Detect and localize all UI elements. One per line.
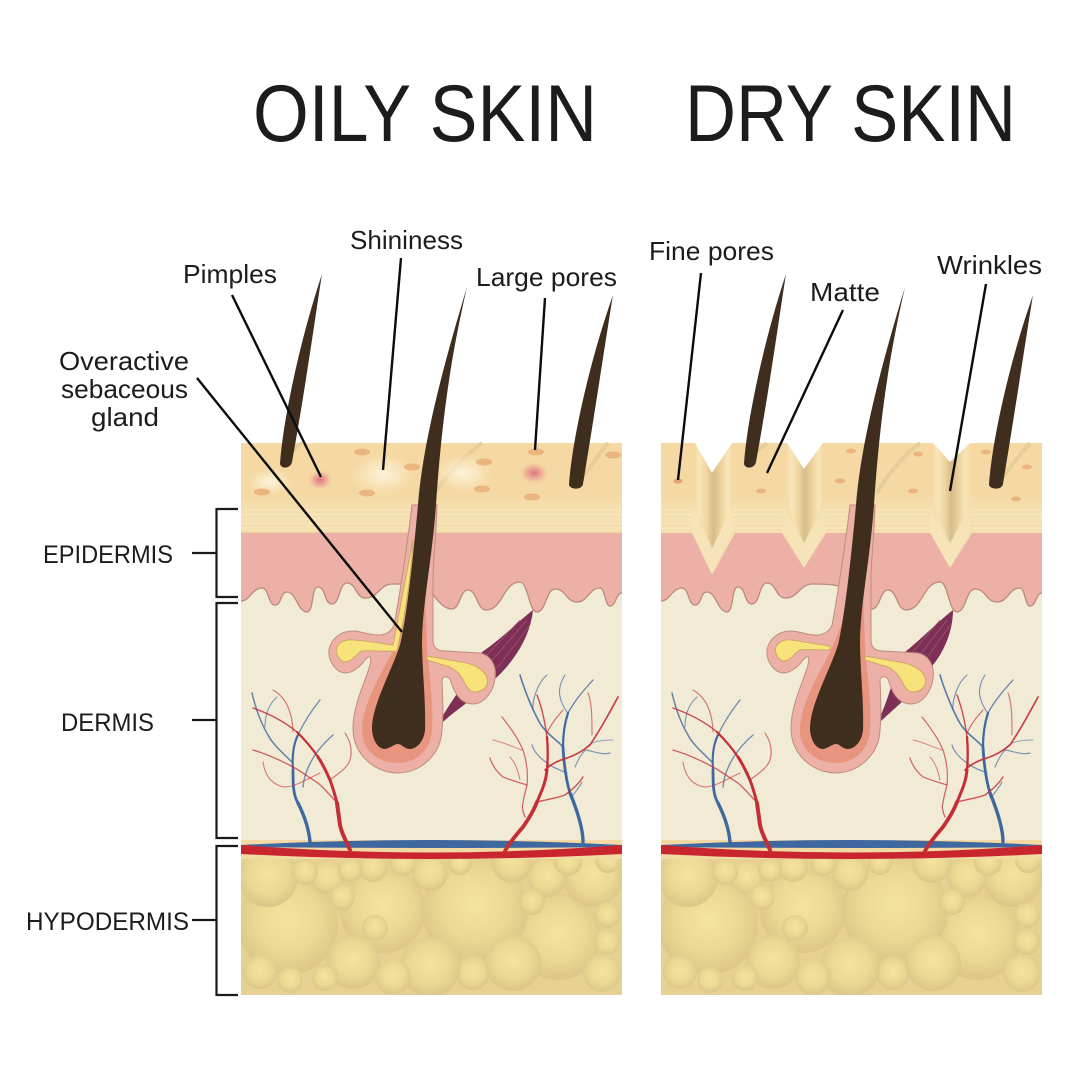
label: wrinkles: Wrinkles xyxy=(937,250,1042,280)
left hair xyxy=(280,274,322,468)
epidermis surface xyxy=(241,443,622,533)
label: overactive sebaceous gland: gland xyxy=(91,402,159,432)
central hair xyxy=(810,287,905,749)
panel: dry skin cross-section xyxy=(658,274,1043,997)
label: overactive sebaceous gland: sebaceous xyxy=(61,374,188,404)
hair follicle xyxy=(767,505,933,773)
dermis, vessels and fat base xyxy=(658,533,1043,997)
pimples xyxy=(306,461,550,491)
epidermis with wrinkles xyxy=(661,443,1042,575)
central hair xyxy=(372,287,467,749)
label: shininess: Shininess xyxy=(350,225,463,255)
leader lines and callouts: dry skin xyxy=(678,273,986,491)
title: oily skin: OILY SKIN xyxy=(253,69,597,159)
arrector muscle xyxy=(442,610,533,723)
panel: oily skin cross-section xyxy=(238,274,623,997)
sebaceous gland xyxy=(775,640,926,692)
arrector muscle xyxy=(880,610,953,722)
bracket: dermis xyxy=(192,603,238,838)
large pores xyxy=(254,448,621,500)
right hair xyxy=(989,295,1033,489)
bracket: hypodermis xyxy=(192,846,238,995)
label: hypodermis: HYPODERMIS xyxy=(26,908,189,936)
right hair xyxy=(569,295,613,489)
left hair xyxy=(744,274,786,468)
label: matte: Matte xyxy=(810,277,880,307)
bracket: epidermis xyxy=(192,509,238,597)
label: large pores: Large pores xyxy=(476,262,617,292)
label: overactive sebaceous gland xyxy=(59,346,189,432)
label: pimples: Pimples xyxy=(183,259,277,289)
hair follicle xyxy=(329,505,495,773)
dermis, vessels and fat base xyxy=(238,533,623,997)
label: epidermis: EPIDERMIS xyxy=(43,541,173,569)
overactive sebaceous gland xyxy=(336,540,488,692)
leader lines and callouts: oily skin xyxy=(197,258,545,632)
fine pores xyxy=(674,448,1032,502)
label: fine pores: Fine pores xyxy=(649,236,774,266)
label: dermis: DERMIS xyxy=(61,709,154,737)
title: dry skin: DRY SKIN xyxy=(685,69,1016,159)
label: overactive sebaceous gland: Overactive xyxy=(59,346,189,376)
